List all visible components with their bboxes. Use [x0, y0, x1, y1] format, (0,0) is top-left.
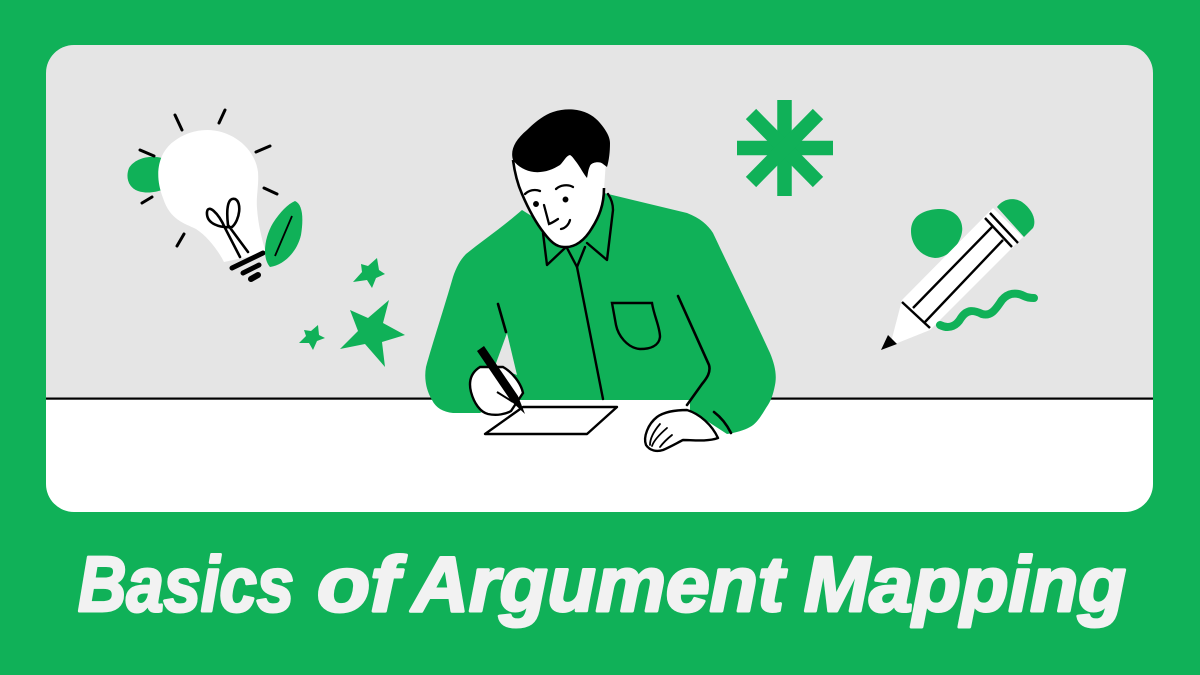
title: Mapping: [804, 540, 1126, 628]
leaf: [265, 201, 302, 267]
paper: [485, 407, 617, 434]
fingers: [650, 424, 672, 447]
panel: illustration scene: [46, 45, 1153, 512]
icon: pencil: [881, 199, 1034, 350]
pocket: [612, 303, 660, 349]
pencil lines: [902, 213, 1018, 328]
title: Basics: [78, 540, 294, 628]
face outline: [513, 160, 604, 247]
ear: [590, 162, 604, 184]
writing hand: [470, 367, 523, 415]
light rays: [140, 110, 277, 246]
bulb glass: [158, 130, 266, 262]
arm gap: [495, 333, 517, 375]
collar: [543, 194, 613, 399]
squiggle: [940, 294, 1034, 327]
title: of: [317, 540, 407, 628]
pencil body: [890, 208, 1023, 346]
pen: [477, 346, 525, 414]
finger line: [497, 392, 513, 402]
eyes, eyebrows, nose, mouth: [525, 185, 573, 229]
sleeve lines: [498, 296, 731, 433]
icon: stars: [299, 258, 405, 367]
icon: light bulb: [127, 110, 302, 279]
title: Argument: [410, 540, 787, 628]
filament: [207, 199, 248, 257]
eraser: [997, 199, 1034, 237]
pencil tip: [881, 335, 897, 350]
figure: man writing: [425, 109, 776, 451]
icon: asterisk: [737, 100, 833, 196]
hair: [512, 109, 610, 178]
bulb base: [232, 253, 263, 279]
green blob: [911, 209, 962, 258]
face and neck: [513, 130, 606, 247]
title: [78, 540, 1126, 628]
shirt: [425, 193, 776, 434]
resting hand: [645, 410, 718, 451]
green blob behind bulb: [127, 157, 162, 193]
